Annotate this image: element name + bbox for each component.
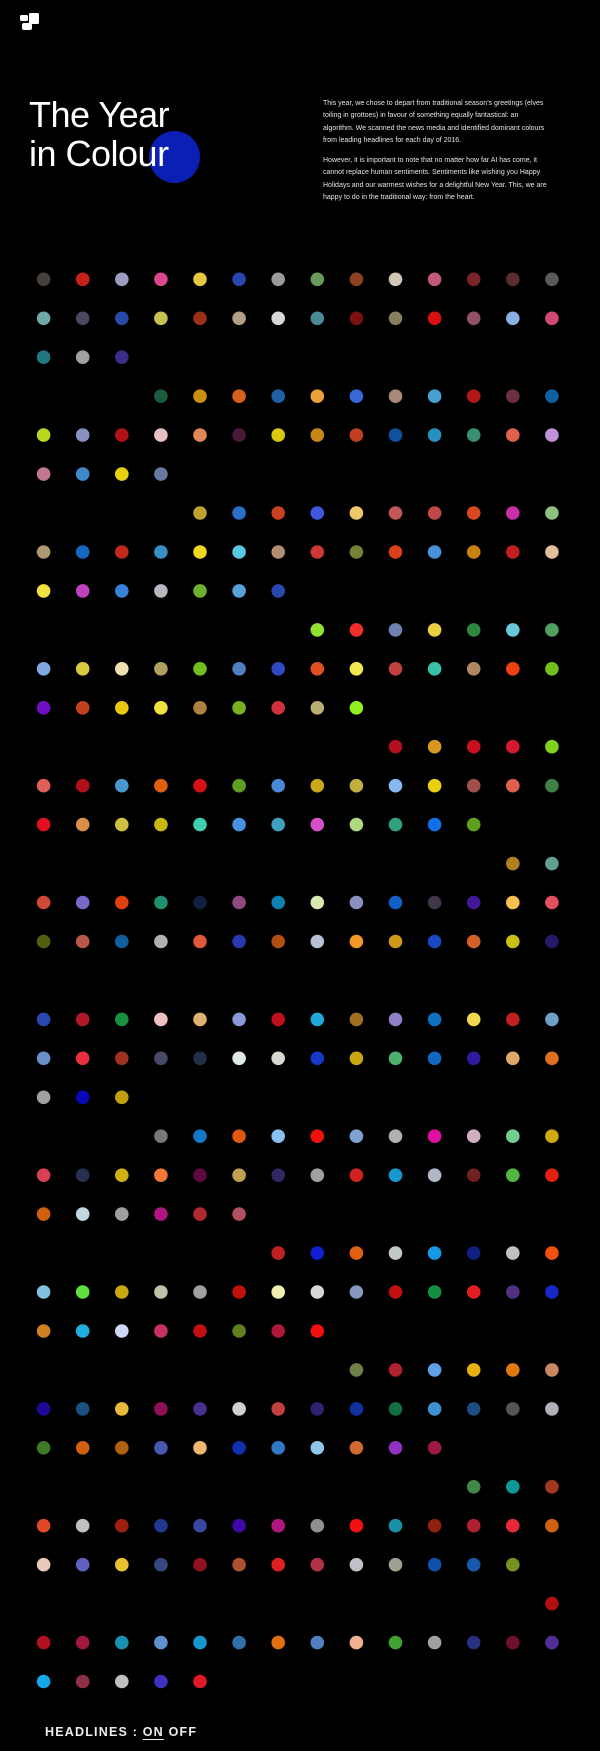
- footer toggle: headlines on/off: HEADLINES : ON OFF: [45, 1725, 197, 1739]
- month: July: [37, 1013, 559, 1104]
- month: November: [37, 1480, 559, 1571]
- text block: intro: from leading headlines for each day of 2016.: [323, 137, 461, 144]
- month: October: [37, 1363, 559, 1455]
- text block: sentiments: happy to do in the traditional way: from the heart.: [323, 194, 475, 201]
- text block: intro: toiling in grottoes) in favour of something equally fantastical: an: [323, 112, 518, 119]
- month: May: [37, 740, 559, 831]
- month: August: [37, 1129, 559, 1221]
- month: September: [37, 1246, 559, 1338]
- month: June: [37, 857, 559, 948]
- month: January: [37, 272, 559, 364]
- month: December: [37, 1597, 559, 1688]
- icon: logo: [20, 13, 39, 30]
- month: April: [37, 623, 559, 715]
- text block: intro: algorithm. We scanned the news media and identified dominant colours: [323, 125, 544, 132]
- month: March: [37, 506, 559, 598]
- text block: sentiments: cannot replace human sentiments. Sentiments like wishing you Happy: [323, 169, 540, 176]
- month: February: [37, 389, 559, 481]
- text block: sentiments: Holidays and our warmest wishes for a delightful New Year. This, we are: [323, 182, 547, 189]
- text block: intro: This year, we chose to depart from traditional season's greetings (elves: [323, 100, 543, 107]
- title: in Colour: [29, 133, 169, 174]
- text block: sentiments: [323, 156, 547, 201]
- title: [29, 94, 170, 174]
- text block: sentiments: However, it is important to note that no matter how far AI has come, it: [323, 157, 537, 164]
- decorative blue circle: [149, 131, 200, 183]
- text block: intro: [323, 100, 544, 144]
- title: The Year: [29, 94, 169, 135]
